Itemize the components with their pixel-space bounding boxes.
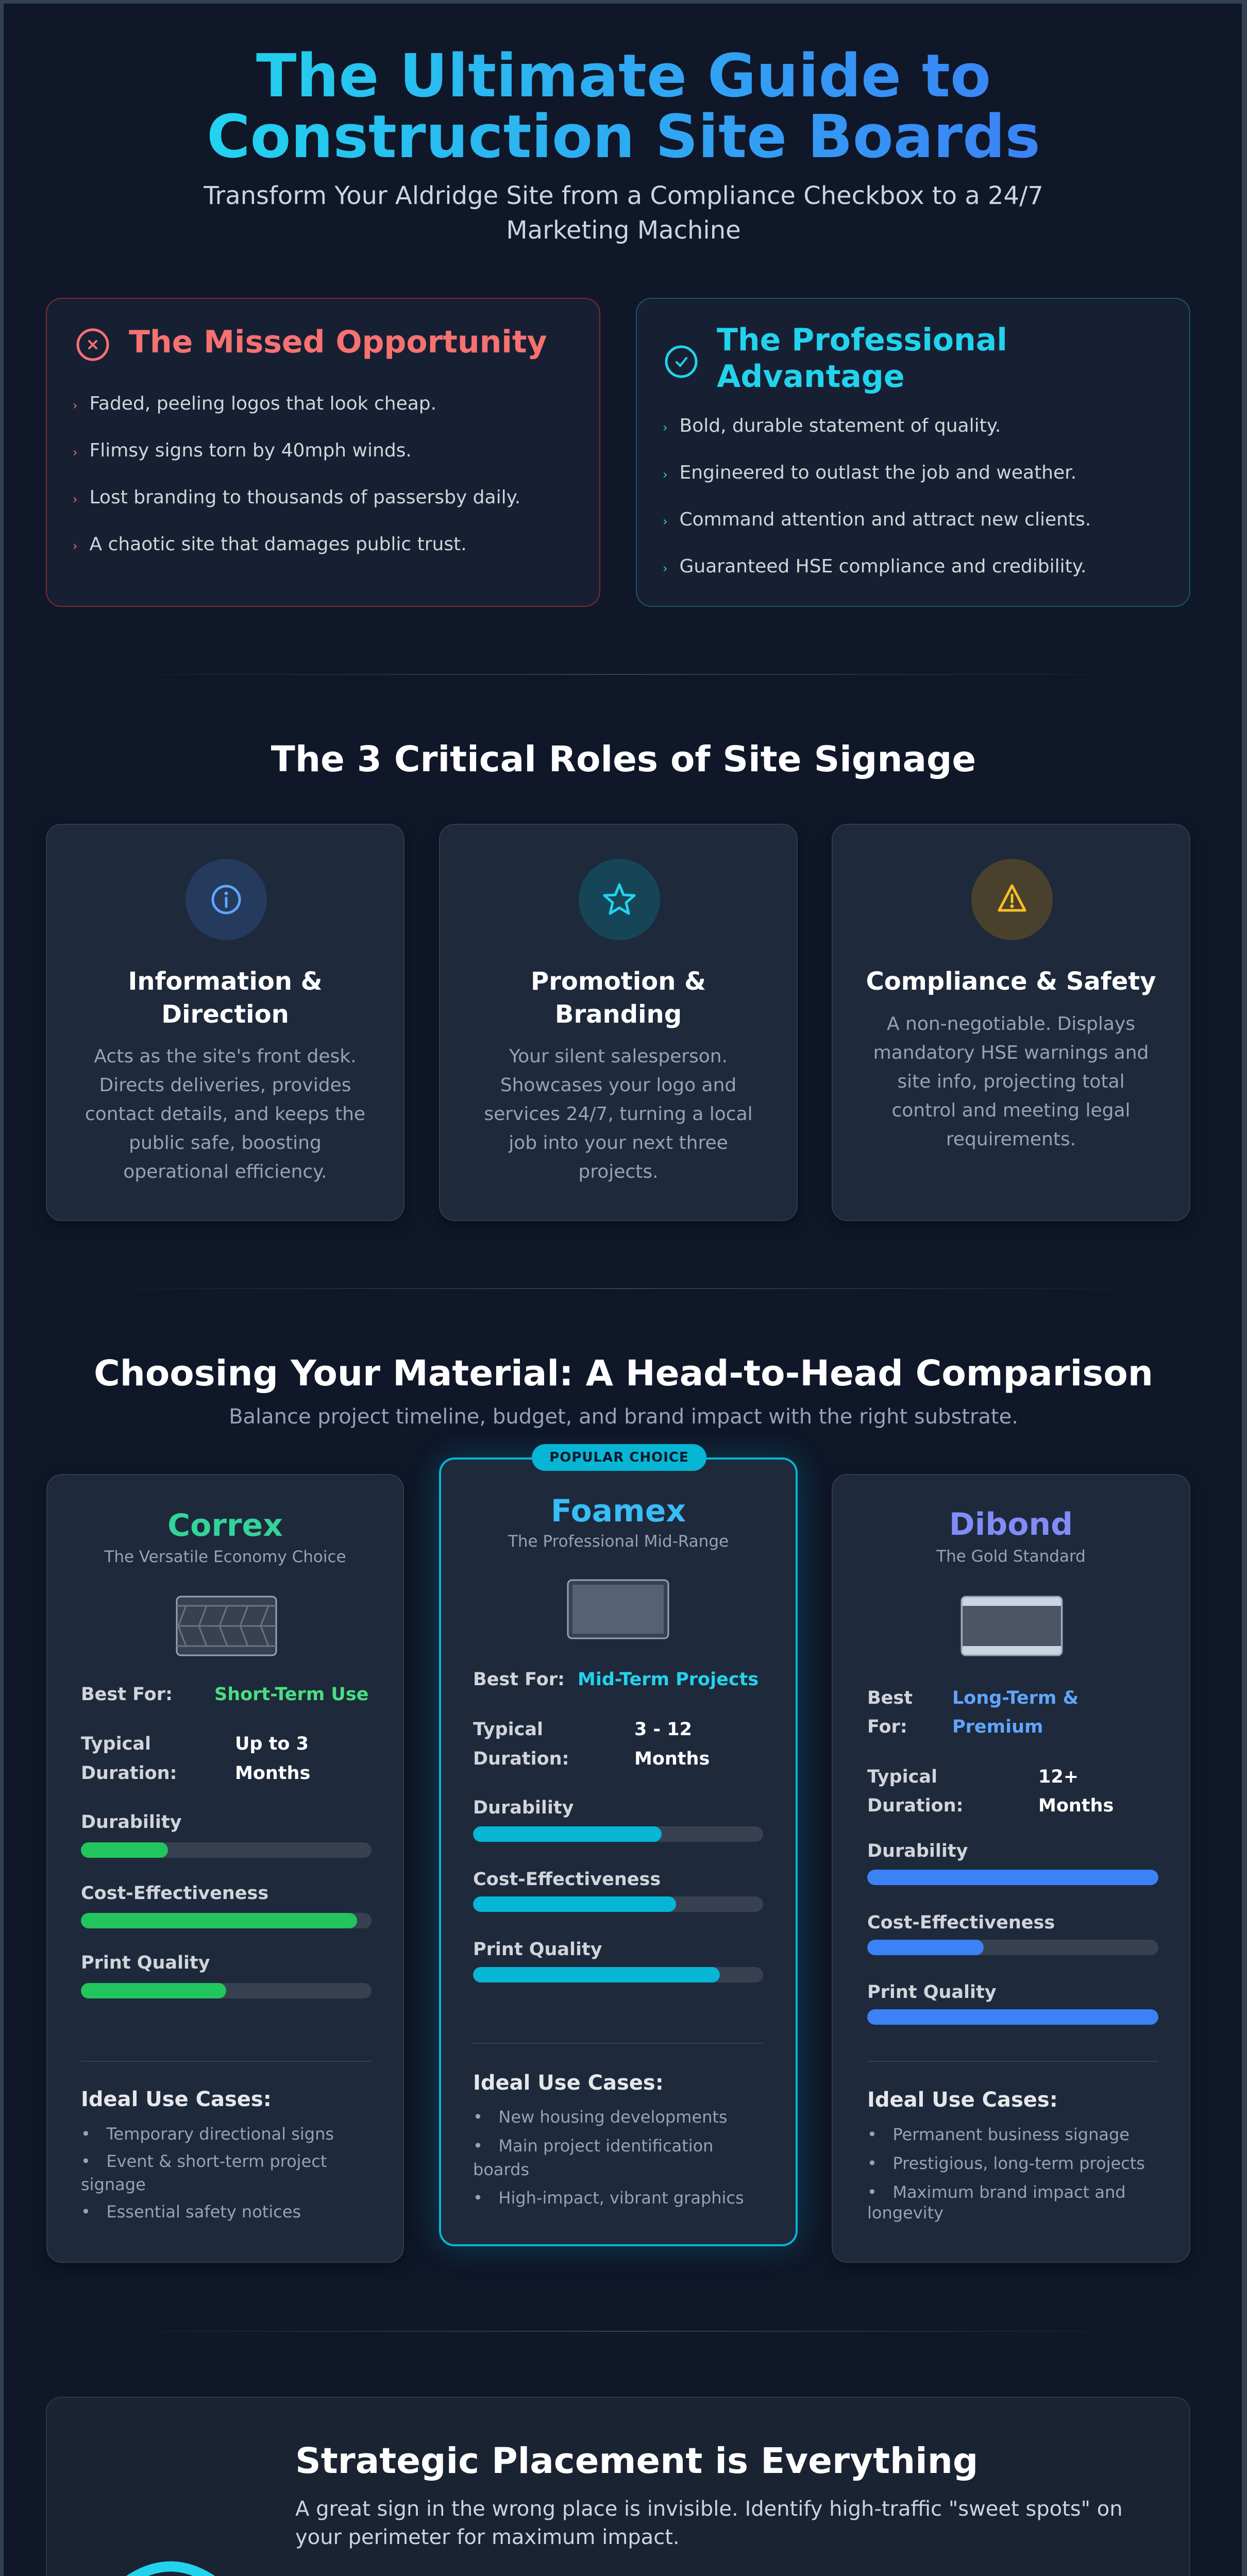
list: › Command attention and attract new clients. (663, 509, 1091, 530)
ideal use cases: Ideal Use Cases: (867, 2088, 1058, 2112)
subheading: Balance project timeline, budget, and brand impact with the right substrate. (229, 1405, 1018, 1429)
title: Construction Site Boards (207, 103, 1040, 172)
ideal use cases: Ideal Use Cases: (81, 2088, 272, 2111)
rating bars: Durability (473, 1798, 574, 1818)
icon: foam board (567, 1580, 669, 1639)
card: dibond: Months (1038, 1795, 1114, 1816)
tagline: The Gold Standard (936, 1547, 1086, 1566)
list: › Engineered to outlast the job and weather. (663, 462, 1076, 483)
body: A non-negotiable. Displays (887, 1013, 1135, 1035)
icon: warning (971, 859, 1053, 940)
card: foamex: 3 - 12 (634, 1719, 692, 1740)
ideal use cases: • Permanent business signage (867, 2125, 1130, 2144)
title: The Ultimate Guide to (256, 42, 991, 111)
best for: Best For: (473, 1669, 565, 1690)
icon: info (186, 859, 267, 940)
name: Correx (167, 1507, 283, 1544)
list: › Bold, durable statement of quality. (663, 415, 1001, 436)
duration: Duration: (473, 1749, 569, 1769)
name: Dibond (949, 1506, 1073, 1543)
subtitle: Marketing Machine (506, 216, 741, 245)
rating bars (867, 1841, 1158, 2025)
card: compliance (832, 824, 1190, 1221)
body: site info, projecting total (897, 1071, 1125, 1092)
card: promotion (439, 824, 798, 1221)
best for: For: (867, 1717, 907, 1737)
heading: 3 critical roles: The 3 Critical Roles of Site Signage (271, 739, 976, 780)
list (663, 415, 1091, 577)
card: foamex: Months (634, 1749, 710, 1769)
card: correx: Short-Term Use (214, 1684, 368, 1705)
subtitle (204, 181, 1043, 245)
name: Foamex (551, 1493, 686, 1529)
body: Showcases your logo and (500, 1075, 736, 1096)
badge (532, 1444, 706, 1471)
ideal use cases: • New housing developments (473, 2107, 728, 2127)
ideal use cases: signage (81, 2175, 146, 2194)
body: Your silent salesperson. (509, 1046, 728, 1067)
rating bars: Cost-Effectiveness (81, 1883, 268, 1904)
duration: Typical (473, 1719, 543, 1740)
ideal use cases (81, 2088, 334, 2222)
ideal use cases: boards (473, 2160, 529, 2179)
list: › A chaotic site that damages public trust. (73, 534, 467, 555)
heading: Strategic Placement is Everything (295, 2441, 978, 2482)
ideal use cases: • High-impact, vibrant graphics (473, 2188, 744, 2208)
ideal use cases: • Temporary directional signs (81, 2124, 334, 2144)
tagline: The Versatile Economy Choice (104, 1548, 346, 1566)
card: foamex (439, 1458, 798, 2246)
ideal use cases: Ideal Use Cases: (473, 2071, 664, 2095)
rating bars (473, 1798, 763, 1982)
body: your perimeter for maximum impact. (295, 2526, 680, 2549)
panel: strategic placement (46, 2397, 1190, 2576)
tagline: The Professional Mid-Range (508, 1532, 729, 1551)
duration (473, 1719, 569, 1769)
duration: Duration: (867, 1795, 964, 1816)
card: correx (46, 1474, 404, 2263)
body: public safe, boosting (129, 1132, 322, 1154)
body: mandatory HSE warnings and (873, 1042, 1149, 1063)
subtitle: Transform Your Aldridge Site from a Compliance Checkbox to a 24/7 (204, 181, 1043, 210)
rating bars: Print Quality (81, 1953, 210, 1973)
heading (717, 322, 1007, 395)
best for: Best (867, 1688, 913, 1708)
rating bars: Print Quality (867, 1982, 997, 2003)
rating bars: Print Quality (473, 1939, 602, 1960)
card: foamex: Mid-Term Projects (578, 1669, 759, 1690)
body: A great sign in the wrong place is invisible. Identify high-traffic "sweet spots" on (295, 2497, 1123, 2521)
icon: fluted board (176, 1596, 277, 1656)
rating bars: Durability (867, 1841, 968, 1861)
body: operational efficiency. (123, 1161, 327, 1182)
ideal use cases (867, 2088, 1145, 2223)
heading: Advantage (717, 359, 905, 395)
body: control and meeting legal (891, 1100, 1131, 1121)
best for: Best For: (81, 1684, 173, 1705)
card: correx: Up to 3 (235, 1734, 309, 1754)
title: Promotion & (531, 967, 706, 996)
ideal use cases: • Prestigious, long-term projects (867, 2154, 1145, 2173)
rating bars: Durability (81, 1812, 181, 1833)
icon: check circle (665, 345, 698, 378)
heading: The Missed Opportunity (129, 324, 547, 360)
card: dibond: Long-Term & (952, 1688, 1079, 1708)
ideal use cases: • Maximum brand impact and (867, 2182, 1126, 2202)
duration: Duration: (81, 1763, 177, 1784)
list: › Lost branding to thousands of passersby daily. (73, 487, 520, 508)
duration: Typical (81, 1734, 151, 1754)
body: Acts as the site's front desk. (94, 1046, 357, 1067)
rating bars: Cost-Effectiveness (473, 1869, 661, 1890)
card: information (46, 824, 405, 1221)
card: correx: Months (235, 1763, 310, 1784)
duration (81, 1734, 177, 1784)
ideal use cases: longevity (867, 2203, 943, 2223)
best for (867, 1688, 913, 1737)
badge: POPULAR CHOICE (549, 1450, 689, 1465)
rating bars: Cost-Effectiveness (867, 1912, 1055, 1933)
body: projects. (578, 1161, 659, 1182)
ideal use cases: • Event & short-term project (81, 2151, 327, 2171)
panel: professional advantage (636, 298, 1190, 607)
list: › Faded, peeling logos that look cheap. (73, 393, 436, 414)
list (73, 393, 520, 555)
body: job into your next three (509, 1132, 728, 1154)
body: services 24/7, turning a local (484, 1104, 753, 1125)
title: Direction (161, 1000, 289, 1029)
title (531, 967, 706, 1029)
card: dibond (832, 1474, 1190, 2263)
title (128, 967, 323, 1029)
title: Compliance & Safety (866, 967, 1156, 996)
body (295, 2497, 1123, 2549)
duration (867, 1767, 964, 1816)
panel: missed opportunity (46, 298, 600, 607)
card: dibond: Premium (952, 1717, 1043, 1737)
body (873, 1013, 1149, 1150)
title: Information & (128, 967, 323, 996)
body: Directs deliveries, provides (99, 1075, 351, 1096)
ideal use cases: • Essential safety notices (81, 2202, 301, 2222)
body (484, 1046, 753, 1182)
list: › Guaranteed HSE compliance and credibility. (663, 556, 1086, 577)
icon: eye (126, 2562, 215, 2576)
duration: Typical (867, 1767, 937, 1787)
title: Branding (555, 1000, 682, 1029)
icon: aluminium composite (960, 1596, 1063, 1656)
heading: The Professional (717, 322, 1007, 358)
heading: choosing material: Choosing Your Material: A Head-to-Head Comparison (94, 1353, 1153, 1394)
icon: star (579, 859, 660, 940)
list: › Flimsy signs torn by 40mph winds. (73, 440, 412, 461)
card: dibond: 12+ (1038, 1767, 1079, 1787)
body: requirements. (946, 1129, 1076, 1150)
rating bars (81, 1812, 372, 1998)
title (207, 42, 1040, 172)
body: contact details, and keeps the (85, 1104, 365, 1125)
body (85, 1046, 365, 1182)
ideal use cases (473, 2071, 744, 2208)
ideal use cases: • Main project identification (473, 2136, 713, 2156)
icon: x circle (76, 329, 109, 361)
